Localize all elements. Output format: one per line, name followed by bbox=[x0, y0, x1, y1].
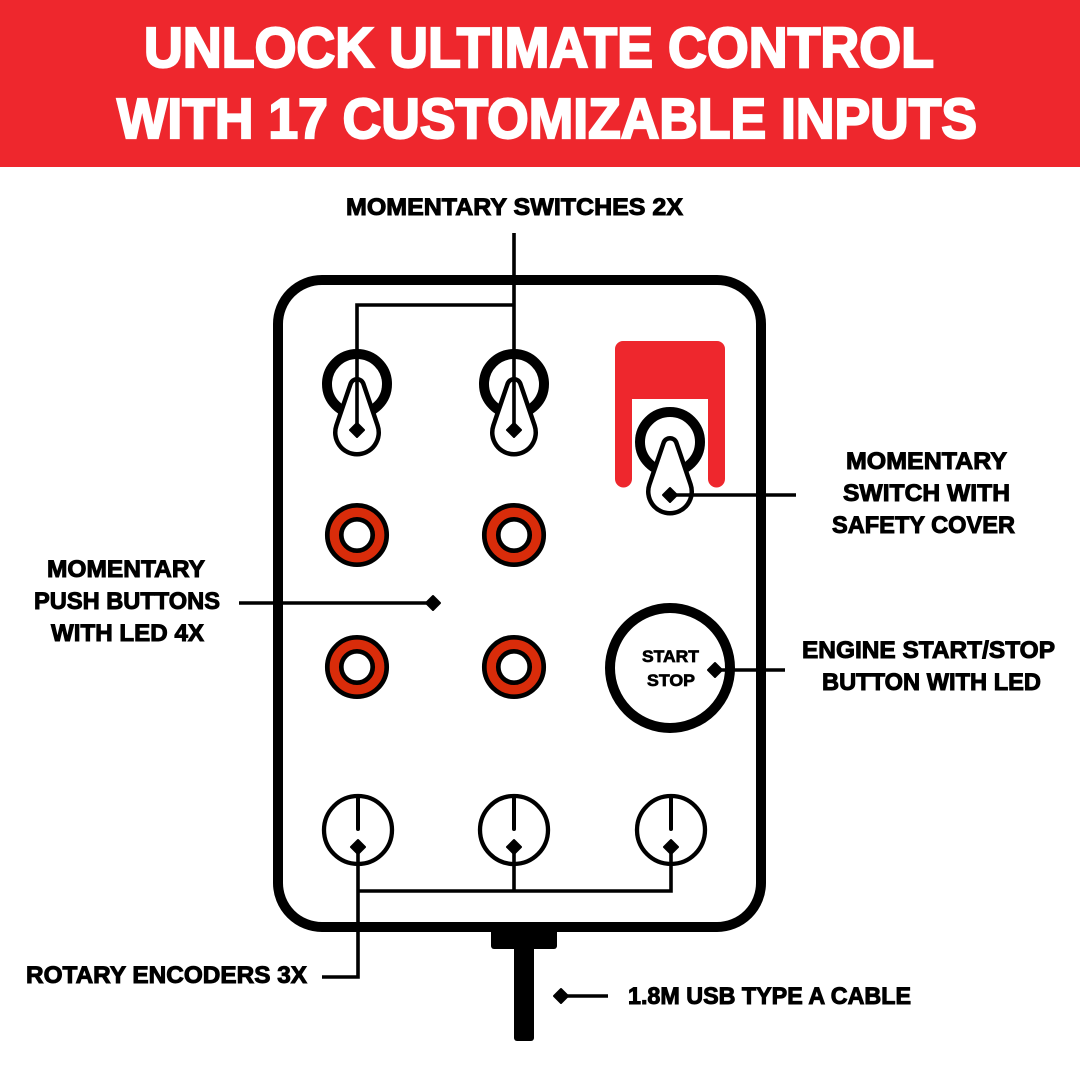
title line 2: WITH 17 CUSTOMIZABLE INPUTS bbox=[117, 87, 977, 151]
label: momentary push buttons: PUSH BUTTONS bbox=[34, 588, 220, 615]
toggle switch with safety cover bbox=[640, 412, 700, 513]
push button bottom left bbox=[327, 637, 387, 697]
label: momentary switch with safety cover: SAFETY COVER bbox=[832, 512, 1015, 539]
callout line: safety cover switch bbox=[663, 488, 796, 502]
engine start stop button bbox=[610, 608, 730, 728]
label: momentary switch with safety cover bbox=[832, 448, 1015, 539]
label: momentary push buttons: MOMENTARY bbox=[47, 556, 205, 583]
label: usb cable: 1.8M USB TYPE A CABLE bbox=[628, 983, 911, 1010]
title banner bbox=[0, 0, 1080, 167]
push button bottom right bbox=[484, 637, 544, 697]
stop label: STOP bbox=[647, 671, 695, 690]
callout line: push buttons bbox=[239, 596, 440, 610]
rotary encoder 3 bbox=[637, 796, 705, 864]
device body outline bbox=[278, 280, 761, 927]
label: momentary switch with safety cover: SWITCH WITH bbox=[843, 480, 1010, 507]
label: momentary push buttons: WITH LED 4X bbox=[51, 620, 204, 647]
rotary encoder 1 bbox=[324, 796, 392, 864]
toggle switch 2 bbox=[484, 354, 544, 454]
callout line: start stop button bbox=[708, 663, 785, 677]
label: engine start stop button: ENGINE START/STOP bbox=[802, 637, 1055, 664]
label: engine start stop button: BUTTON WITH LED bbox=[822, 669, 1041, 696]
label: engine start stop button bbox=[802, 637, 1055, 696]
callout line: rotary encoders bbox=[322, 840, 678, 977]
callout line: usb cable bbox=[554, 989, 608, 1003]
safety cover bbox=[615, 341, 725, 488]
push button top left bbox=[327, 505, 387, 565]
callout line: momentary switches bbox=[350, 233, 521, 437]
USB connector and cable bbox=[491, 925, 557, 1041]
start label: START bbox=[642, 647, 700, 666]
rotary encoder 2 bbox=[480, 796, 548, 864]
label: rotary encoders: ROTARY ENCODERS 3X bbox=[26, 962, 307, 989]
label: momentary switches: MOMENTARY SWITCHES 2X bbox=[346, 194, 683, 221]
push button top right bbox=[484, 505, 544, 565]
title line 1: UNLOCK ULTIMATE CONTROL bbox=[144, 16, 934, 80]
toggle switch 1 bbox=[327, 354, 387, 454]
label: momentary switch with safety cover: MOMENTARY bbox=[846, 448, 1007, 475]
label: momentary push buttons bbox=[34, 556, 220, 647]
